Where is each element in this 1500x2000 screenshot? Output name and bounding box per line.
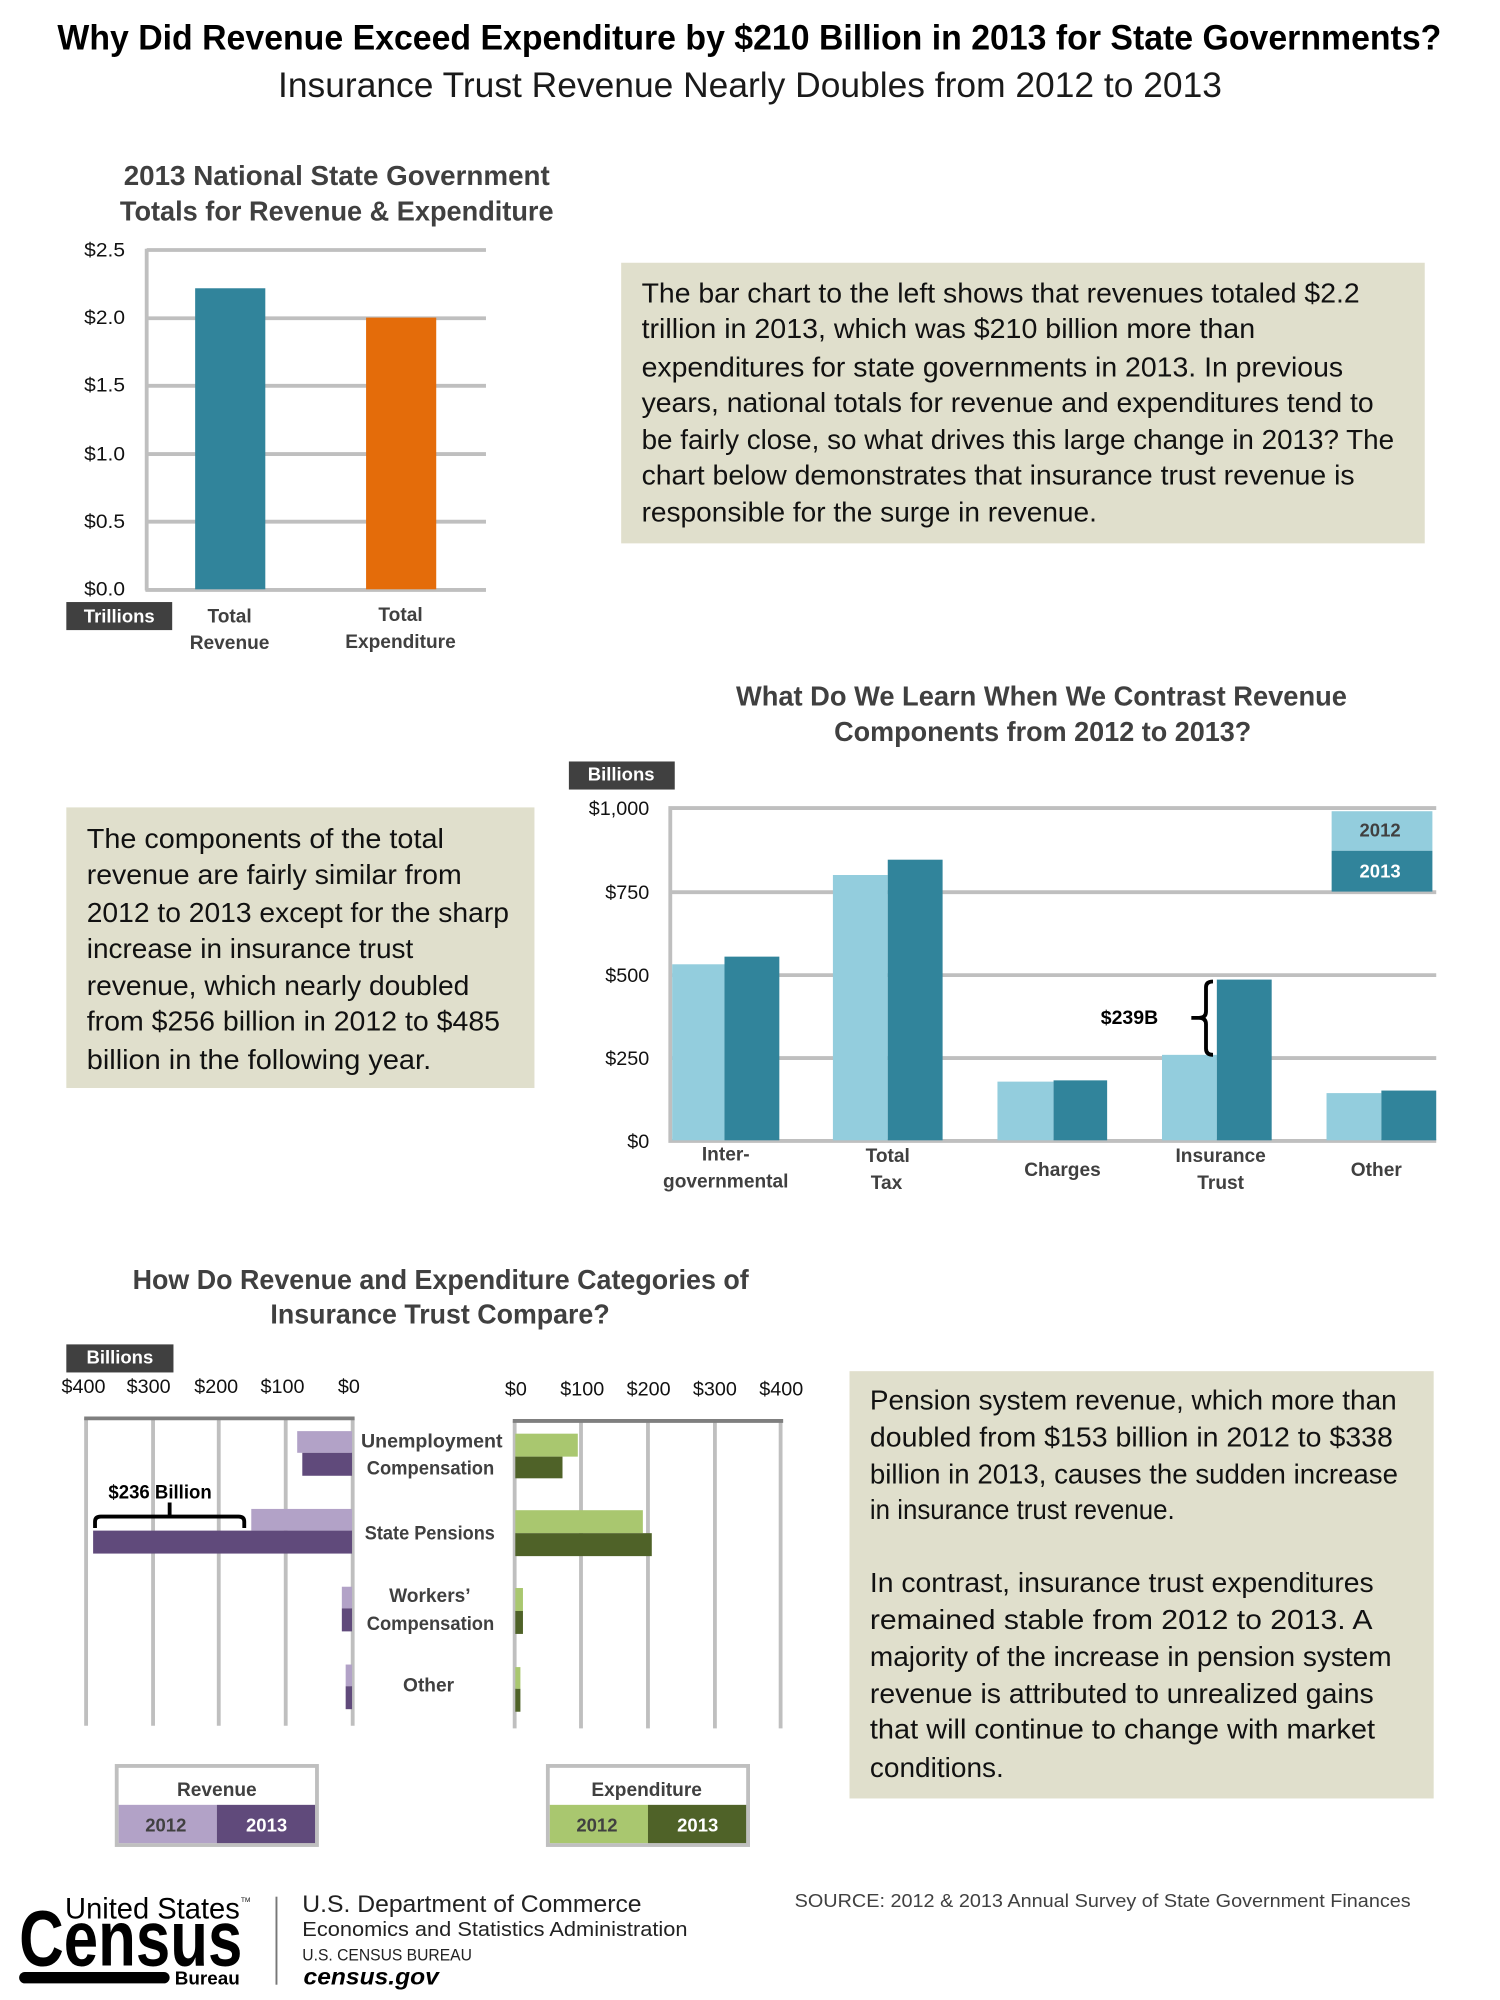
source note: SOURCE: 2012 & 2013 Annual Survey of State Government Finances (795, 1890, 1411, 1911)
legend: revenue (117, 1766, 317, 1845)
category labels: Insurance (1175, 1146, 1266, 1167)
chart heading: 2013 national totals (120, 160, 554, 227)
revenue axis labels: $200 (194, 1376, 238, 1398)
chart heading: revenue components: Components from 2012 to 2013? (834, 716, 1251, 747)
logo: United States Census Bureau and Department of Commerce: U.S. CENSUS BUREAU (302, 1945, 472, 1964)
y axis labels in billions: $1,000 (589, 798, 649, 820)
unit tag: trillions: Trillions (84, 605, 155, 626)
bars: other (1327, 1091, 1436, 1140)
unit tag: trillions (66, 602, 172, 630)
category labels: Unemployment (361, 1432, 503, 1453)
callout: $239B bracket (1101, 982, 1213, 1055)
chart heading: 2013 national totals: Totals for Revenue & Expenditure (120, 196, 554, 227)
title: Insurance Trust Revenue Nearly Doubles from 2012 to 2013 (278, 66, 1222, 105)
text block: components explanation: 2012 to 2013 except for the sharp (87, 897, 509, 928)
text block: pension explanation: revenue is attributed to unrealized gains (870, 1678, 1374, 1709)
bars: charges (997, 1080, 1107, 1140)
logo: United States Census Bureau and Department of Commerce (19, 1891, 688, 1990)
text block: pension explanation (849, 1371, 1434, 1798)
category labels: Compensation (367, 1614, 494, 1635)
revenue axis labels: $100 (261, 1376, 305, 1398)
category labels: Compensation (367, 1458, 494, 1479)
callout: $239B bracket: $239B (1101, 1008, 1158, 1029)
expenditure axis labels: $100 (560, 1378, 604, 1400)
category labels: Other (1351, 1160, 1402, 1181)
text block: components explanation: revenue, which nearly doubled (87, 970, 469, 1001)
text block: pension explanation: In contrast, insurance trust expenditures (870, 1567, 1374, 1598)
text block: bar chart explanation: responsible for the surge in revenue. (642, 497, 1097, 528)
bars: insurance trust (1162, 980, 1272, 1140)
y axis labels in trillions: $1.0 (84, 443, 125, 465)
y axis labels in trillions (84, 239, 125, 601)
bars: intergovernmental (672, 957, 779, 1140)
category labels (361, 1432, 503, 1696)
panel: insurance trust categories chart (62, 1264, 803, 1845)
category label: total expenditure: Expenditure (345, 632, 456, 653)
chart heading: insurance trust categories: Insurance Trust Compare? (270, 1298, 610, 1329)
logo: United States Census Bureau and Department of Commerce: Bureau (175, 1968, 240, 1989)
y axis labels in trillions: $1.5 (84, 375, 125, 397)
category labels: Total (866, 1146, 910, 1167)
text block: components explanation: The components of the total (87, 823, 444, 854)
category label: total revenue (190, 606, 269, 654)
chart heading: 2013 national totals: 2013 National State Government (124, 160, 550, 191)
text block: components explanation: from $256 billion in 2012 to $485 (87, 1006, 500, 1037)
revenue bars (93, 1431, 352, 1709)
unit tag: billions (66, 1344, 173, 1372)
bar: total revenue (195, 288, 265, 589)
bars: total tax (833, 860, 943, 1140)
logo: United States Census Bureau and Department of Commerce: Census (19, 1894, 242, 1983)
category labels: Charges (1024, 1160, 1101, 1181)
legend: expenditure: 2013 (677, 1815, 718, 1836)
title (57, 19, 1441, 105)
text block: components explanation: billion in the following year. (87, 1044, 431, 1075)
category label: total expenditure (345, 605, 456, 653)
text block: components explanation: increase in insurance trust (87, 933, 414, 964)
chart heading: revenue components: What Do We Learn When We Contrast Revenue (736, 680, 1347, 711)
text block: bar chart explanation: years, national totals for revenue and expenditures tend to (642, 387, 1374, 418)
y axis labels in trillions: $2.5 (84, 239, 125, 261)
legend: revenue: 2013 (246, 1815, 287, 1836)
text block: pension explanation: in insurance trust revenue. (870, 1494, 1175, 1525)
expenditure bars (515, 1434, 652, 1712)
y axis labels in billions: $500 (605, 965, 649, 987)
y axis labels in billions: $0 (627, 1131, 649, 1153)
y axis labels in trillions: $2.0 (84, 307, 125, 329)
category labels: Tax (871, 1173, 903, 1194)
expenditure axis labels: $0 (505, 1378, 527, 1400)
unit tag: billions: Billions (588, 764, 655, 785)
category labels: governmental (663, 1171, 788, 1192)
callout: $236 billion bracket (95, 1483, 244, 1528)
y axis labels in billions: $750 (605, 882, 649, 904)
text block: pension explanation: billion in 2013, causes the sudden increase (870, 1458, 1398, 1489)
logo: United States Census Bureau and Department of Commerce: U.S. Department of Commerce (302, 1891, 642, 1918)
revenue axis labels: $300 (127, 1376, 171, 1398)
category labels: Workers’ (389, 1586, 471, 1607)
legend: expenditure (548, 1766, 748, 1845)
text block: bar chart explanation: expenditures for state governments in 2013. In previous (642, 351, 1343, 382)
chart heading: insurance trust categories: How Do Revenue and Expenditure Categories of (133, 1264, 749, 1295)
logo: United States Census Bureau and Department of Commerce: TM (241, 1897, 250, 1904)
expenditure axis labels: $200 (627, 1378, 671, 1400)
logo: United States Census Bureau and Department of Commerce: census.gov (304, 1964, 440, 1990)
callout: $236 billion bracket: $236 Billion (108, 1483, 212, 1504)
unit tag: billions: Billions (87, 1347, 153, 1368)
legend: 2012 and 2013: 2012 (1360, 820, 1401, 841)
logo: United States Census Bureau and Department of Commerce: Economics and Statistics Administration (302, 1919, 687, 1941)
legend: expenditure: 2012 (576, 1815, 618, 1836)
unit tag: billions (569, 761, 675, 790)
revenue axis labels: $0 (338, 1376, 360, 1398)
text block: components explanation: revenue are fairly similar from (87, 859, 462, 890)
category label: total revenue: Total (207, 606, 252, 627)
legend: expenditure: Expenditure (591, 1780, 702, 1801)
chart heading: revenue components (736, 680, 1347, 747)
category label: total revenue: Revenue (190, 633, 269, 654)
title: Why Did Revenue Exceed Expenditure by $210 Billion in 2013 for State Governments? (57, 19, 1441, 58)
y axis labels in trillions: $0.0 (84, 579, 125, 601)
text block: pension explanation: conditions. (870, 1752, 1004, 1783)
text block: pension explanation: that will continue to change with market (870, 1714, 1375, 1745)
y axis labels in billions (589, 798, 649, 1153)
category labels: Inter- (702, 1145, 750, 1166)
legend: 2012 and 2013: 2013 (1360, 861, 1401, 882)
revenue axis labels: $400 (62, 1376, 106, 1398)
legend: 2012 and 2013 (1332, 811, 1432, 892)
text block: bar chart explanation: chart below demonstrates that insurance trust revenue is (642, 460, 1355, 491)
category labels: Other (403, 1675, 455, 1696)
y axis labels in trillions: $0.5 (84, 511, 125, 533)
text block: bar chart explanation: be fairly close, so what drives this large change in 2013? The (642, 424, 1394, 455)
text block: bar chart explanation: trillion in 2013, which was $210 billion more than (642, 313, 1255, 344)
chart heading: insurance trust categories (133, 1264, 749, 1329)
logo: United States Census Bureau and Department of Commerce: United States (65, 1892, 240, 1925)
text block: pension explanation: majority of the increase in pension system (870, 1641, 1392, 1672)
expenditure axis labels: $300 (693, 1378, 737, 1400)
category label: total expenditure: Total (378, 605, 423, 626)
bar: total expenditure (366, 318, 436, 589)
text block: bar chart explanation: The bar chart to the left shows that revenues totaled $2.2 (642, 277, 1360, 308)
text block: pension explanation: remained stable from 2012 to 2013. A (870, 1604, 1373, 1635)
text block: components explanation (66, 807, 534, 1088)
revenue axis labels (62, 1376, 360, 1398)
expenditure axis labels (505, 1378, 803, 1400)
expenditure axis labels: $400 (759, 1378, 803, 1400)
text block: pension explanation: Pension system revenue, which more than (870, 1384, 1397, 1415)
category labels: State Pensions (365, 1524, 495, 1545)
text block: bar chart explanation (621, 263, 1425, 543)
panel: total revenue and expenditure bar chart (66, 160, 554, 654)
category labels (663, 1145, 1402, 1194)
category labels: Trust (1197, 1173, 1245, 1194)
legend: revenue: 2012 (145, 1815, 186, 1836)
y axis labels in billions: $250 (605, 1048, 649, 1070)
legend: revenue: Revenue (177, 1780, 257, 1801)
text block: pension explanation: doubled from $153 billion in 2012 to $338 (870, 1421, 1393, 1452)
panel: revenue components chart (569, 680, 1436, 1194)
